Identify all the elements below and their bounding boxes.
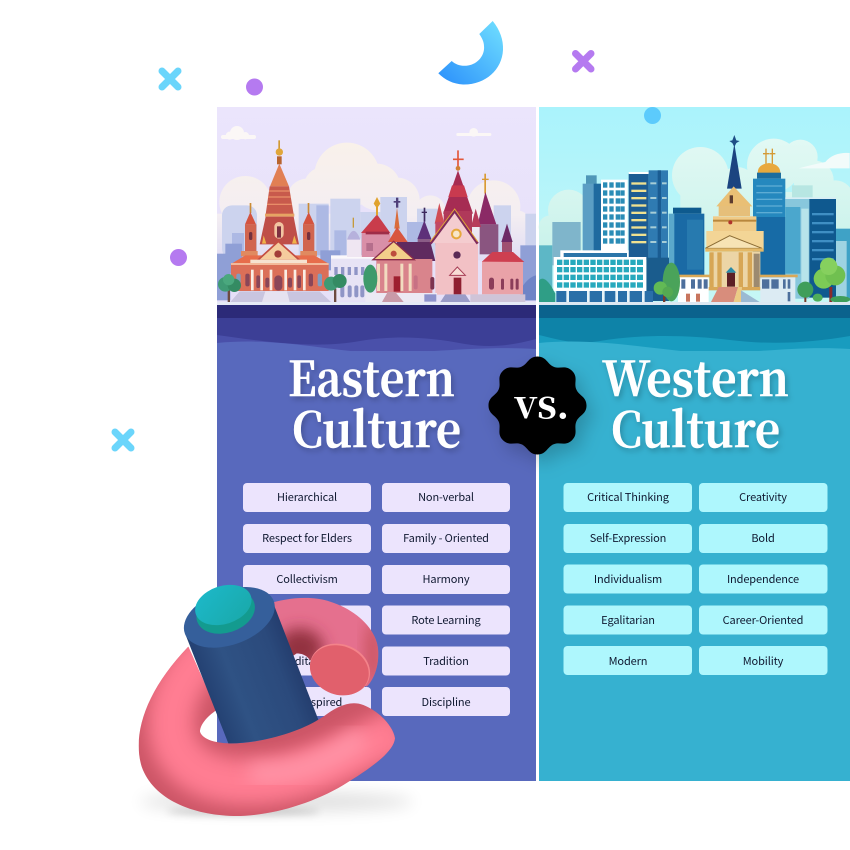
ground shadow (140, 792, 413, 815)
list: eastern traits: Spirit Inspired (272, 694, 342, 710)
trees (654, 258, 850, 303)
ring: upper arm (274, 598, 378, 696)
list: eastern traits: Family - Oriented (403, 530, 489, 546)
list: western traits: Individualism (594, 571, 662, 587)
list: eastern traits: Harmony (423, 571, 470, 587)
list: eastern traits: Rote Learning (411, 612, 481, 628)
list: western traits: Mobility (743, 653, 784, 669)
decoration: purple dot left (170, 249, 187, 266)
heading: western culture: Western (602, 341, 789, 410)
building: right towers (753, 149, 850, 300)
list: western traits: Self-Expression (590, 530, 666, 546)
building: low glass office (554, 250, 669, 302)
heading: western culture: Culture (611, 392, 780, 461)
decoration: blue crescent (438, 21, 503, 85)
trees and balustrades (218, 265, 525, 302)
illustration: western skyline (539, 107, 850, 309)
list: western traits: Critical Thinking (587, 489, 670, 505)
building: spired chapel (373, 198, 435, 294)
list: eastern traits: Collectivism (276, 571, 338, 587)
panel: western culture (539, 107, 850, 781)
list: eastern traits: Discipline (422, 694, 470, 710)
building: glass towers (583, 170, 704, 275)
cylinder (176, 575, 318, 743)
building: central golden temple (677, 135, 798, 302)
decoration: blue cross top left (162, 71, 178, 87)
list: western traits: Modern (609, 653, 647, 669)
list: western traits: Egalitarian (601, 612, 655, 628)
building: white domed hall (331, 218, 374, 301)
list: western traits: Career-Oriented (723, 612, 803, 628)
list: eastern traits: Respect for Elders (262, 530, 352, 546)
heading: eastern culture: Eastern (288, 341, 455, 410)
list: western traits (564, 483, 828, 675)
ring: lower arm (138, 646, 395, 816)
list: eastern traits: Tradition (423, 653, 469, 669)
illustration: eastern skyline (217, 107, 536, 309)
panel: eastern culture (217, 107, 536, 781)
list: eastern traits: Meditation (280, 653, 334, 669)
3D shape: pink ring and navy cylinder (138, 584, 406, 820)
list: eastern traits: Humility (286, 612, 329, 628)
list: western traits: Creativity (739, 489, 787, 505)
list: eastern traits: Non-verbal (418, 489, 474, 505)
building: grand church (430, 150, 524, 295)
list: western traits: Bold (751, 530, 775, 546)
heading: eastern culture: Culture (292, 392, 461, 461)
decoration: blue cross bottom left (115, 432, 131, 448)
decoration: blue dot (644, 107, 661, 124)
heading: western culture (602, 341, 789, 461)
heading: eastern culture (288, 341, 461, 461)
list: eastern traits: Hierarchical (277, 489, 337, 505)
decoration: purple cross top right (576, 54, 591, 69)
list: western traits: Independence (727, 571, 799, 587)
water bands (217, 305, 536, 362)
badge: vs. (488, 356, 586, 454)
list: eastern traits (243, 483, 510, 716)
badge: vs.: vs. (514, 374, 570, 430)
water bands (539, 305, 850, 362)
building: left temple (230, 140, 331, 302)
decoration: purple dot top (246, 78, 263, 96)
building: pink pagoda (361, 197, 390, 257)
